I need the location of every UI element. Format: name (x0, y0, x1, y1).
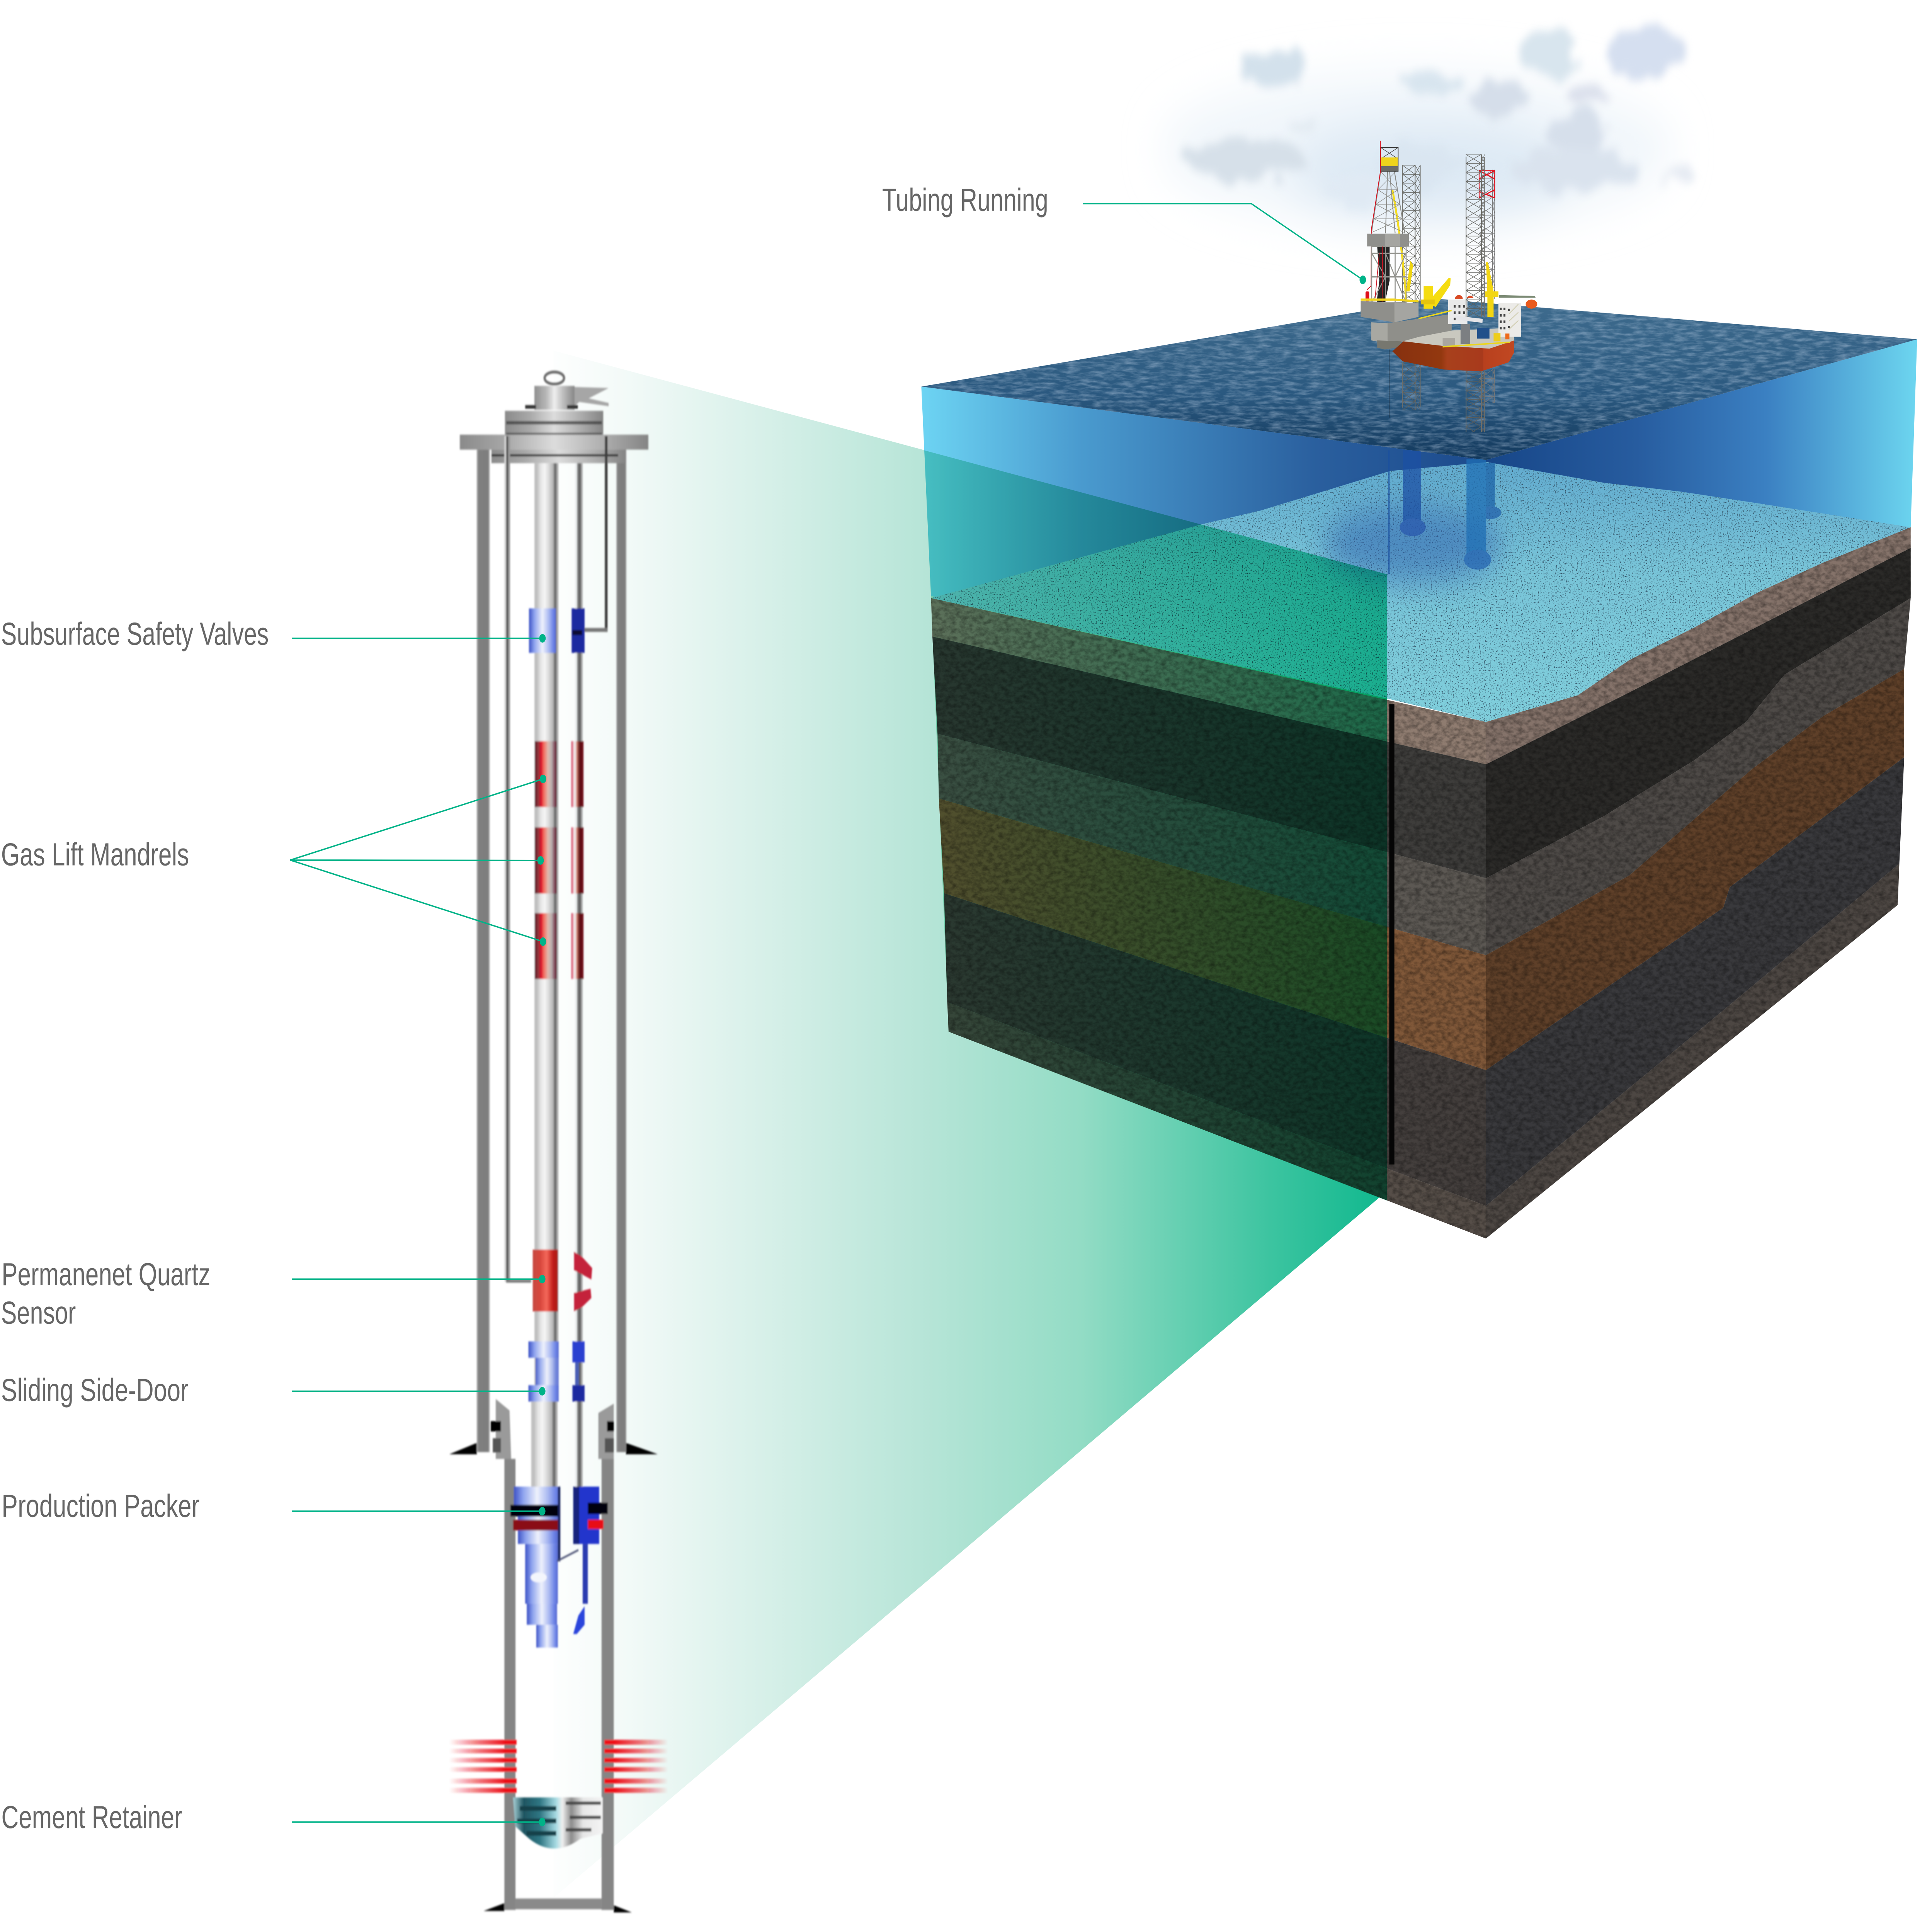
casing shoe left (449, 1443, 477, 1454)
cement retainer (513, 1798, 603, 1849)
leader: Permanent Quartz Sensor (292, 1275, 546, 1283)
accommodation block, front (1498, 303, 1521, 337)
seabed shadow under the rig (1323, 505, 1501, 584)
leader: Tubing Running (1083, 204, 1366, 284)
derrick red riser line (1367, 141, 1380, 289)
well completion diagram (449, 372, 668, 1912)
small rear lifeboats (1455, 295, 1474, 299)
production packer section view (573, 1486, 608, 1634)
label: Tubing Running: Tubing Running (882, 182, 1048, 218)
left control line (504, 436, 531, 1283)
seabed surface (931, 462, 1911, 722)
red tank (1366, 291, 1369, 301)
leader: Cement Retainer (292, 1818, 546, 1826)
production liner right wall (602, 1459, 614, 1910)
perforations right (604, 1740, 668, 1793)
label: Gas Lift Mandrels: Gas Lift Mandrels (1, 836, 189, 872)
top drive, yellow (1381, 157, 1398, 166)
water column, right face (1486, 339, 1917, 719)
leader: Gas Lift Mandrels, three arrows (290, 775, 546, 946)
outer casing, right wall (616, 450, 626, 1452)
hull (1392, 340, 1514, 371)
green projection wedge from the reservoir block to the well diagram (554, 350, 1387, 1898)
safety valve section view (571, 609, 585, 653)
secondary tubing section view (575, 463, 583, 1487)
helideck (1499, 295, 1536, 298)
wellhead stack (505, 405, 603, 436)
far right leg lattice (1479, 170, 1495, 403)
leader: Subsurface Safety Valves (292, 634, 546, 643)
liner shoe right (614, 1905, 632, 1912)
liner hanger, right (599, 1404, 614, 1459)
white piping bundle on deck (1456, 318, 1483, 321)
casing shoe right (626, 1443, 658, 1454)
lower tubing (531, 1401, 558, 1487)
derrick upper housing (1381, 166, 1398, 171)
yellow lattice mast behind derrick (1392, 190, 1406, 299)
wellhead side handle (575, 387, 609, 406)
substructure frame (1372, 247, 1406, 303)
orange lifeboat (1526, 299, 1537, 309)
accommodation block, rear (1448, 299, 1468, 324)
leader: Sliding Side-Door (292, 1387, 546, 1396)
label: Permanent Quartz Sensor (1, 1256, 210, 1330)
deck machinery (1418, 311, 1510, 347)
leader: Production Packer (292, 1507, 546, 1515)
perforations left (449, 1740, 517, 1793)
clouds behind the rig (1161, 25, 1699, 224)
left crane, yellow (1421, 278, 1451, 309)
right control line (583, 436, 607, 632)
wellhead valve body (534, 386, 575, 410)
label: Sliding Side-Door: Sliding Side-Door (1, 1372, 189, 1408)
subsurface strata block (931, 527, 1911, 1238)
black well bore line (1389, 704, 1395, 1165)
label: Subsurface Safety Valves: Subsurface Safety Valves (1, 616, 269, 652)
derrick crane, yellow (1406, 260, 1413, 291)
sliding side door (529, 1342, 585, 1401)
derrick tower (1371, 148, 1405, 233)
gas lift mandrel 3 (535, 913, 583, 979)
main production tubing (534, 463, 558, 1401)
dark drill floor core (1376, 247, 1389, 303)
label: Permanent Quartz Sensor: Permanenet Quartz (2, 1256, 210, 1292)
label: Permanent Quartz Sensor: Sensor (1, 1294, 76, 1330)
water column, left face (921, 387, 1486, 719)
green tint over the block (924, 450, 1387, 1201)
label: Cement Retainer: Cement Retainer (1, 1799, 182, 1835)
main leg lattice (1466, 154, 1485, 432)
right face strata (1486, 527, 1911, 1238)
hanger dark line (492, 454, 618, 456)
liner hanger, left (491, 1399, 511, 1459)
tubing hanger (492, 450, 626, 463)
label: Production Packer: Production Packer (2, 1488, 199, 1524)
subsurface safety valve (529, 609, 556, 653)
liner shoe left (484, 1903, 504, 1911)
production liner left wall (504, 1459, 515, 1910)
left rear leg lattice (1402, 165, 1420, 410)
gas lift mandrel 2 (535, 827, 583, 894)
gas lift mandrel 1 (535, 741, 583, 807)
submerged tubing string line (1388, 450, 1389, 574)
outer casing, left wall (476, 450, 490, 1452)
liner floor (515, 1898, 602, 1909)
rear gray cantilever (1371, 314, 1452, 344)
wellhead flange (460, 435, 648, 450)
main leg crane, yellow (1485, 262, 1498, 317)
drill floor gray housing (1367, 234, 1409, 247)
left face strata (931, 598, 1486, 1238)
production packer (510, 1486, 578, 1648)
permanent quartz sensor (533, 1250, 592, 1311)
wellhead valve handwheel (545, 372, 564, 384)
gray deck box (1361, 301, 1418, 322)
sea surface (921, 299, 1917, 460)
main deck equipment area (1403, 328, 1514, 350)
submerged rig legs (1400, 450, 1501, 570)
jack-up rig (1361, 141, 1537, 432)
